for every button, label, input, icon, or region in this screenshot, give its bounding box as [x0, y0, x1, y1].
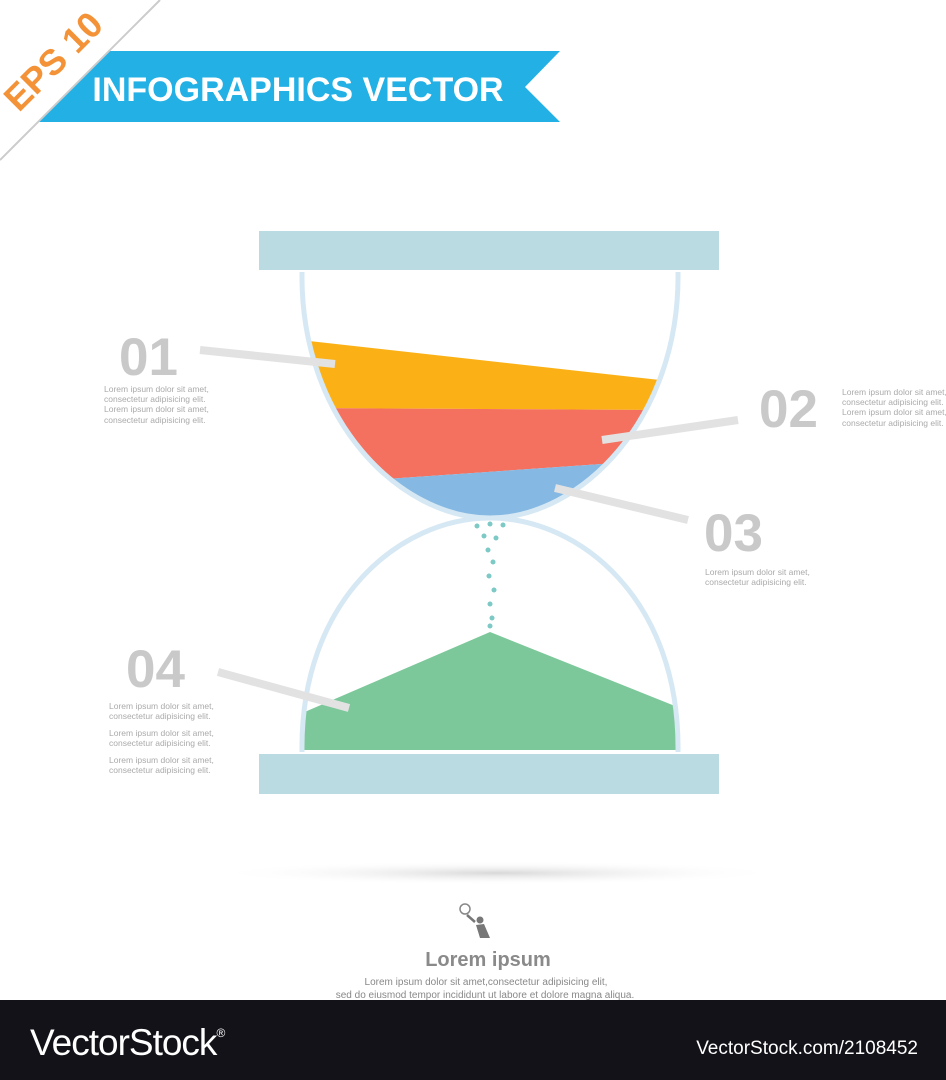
callout 01: consectetur adipisicing elit. [104, 415, 206, 425]
icon: person with lightbulb [460, 904, 490, 938]
callout 04: consectetur adipisicing elit. [109, 765, 211, 775]
watermark bar: VectorStock [30, 1022, 216, 1063]
callout 01 [104, 328, 335, 425]
callout 04: 04 [126, 640, 185, 699]
hourglass [259, 231, 719, 794]
callout 02: 02 [759, 380, 818, 439]
callout 04: Lorem ipsum dolor sit amet, [109, 701, 214, 711]
corner badge: EPS 10 [0, 0, 160, 160]
sand top layers [312, 341, 657, 516]
callout 03: Lorem ipsum dolor sit amet, [705, 567, 810, 577]
callout 02 [602, 380, 946, 440]
title ribbon [36, 51, 560, 122]
footer text block: Lorem ipsum [425, 949, 551, 971]
callout 04 [109, 640, 349, 775]
watermark bar: VectorStock.com/2108452 [696, 1038, 918, 1059]
callout 02: Lorem ipsum dolor sit amet, [842, 387, 946, 397]
callout 01: Lorem ipsum dolor sit amet, [104, 404, 209, 414]
falling sand dots [474, 522, 506, 628]
callout 01: Lorem ipsum dolor sit amet, [104, 384, 209, 394]
sand bottom [300, 632, 680, 750]
callout 04: Lorem ipsum dolor sit amet, [109, 728, 214, 738]
callout 03: 03 [704, 504, 763, 563]
footer text block [336, 949, 634, 1001]
callout 02: consectetur adipisicing elit. [842, 418, 944, 428]
footer text block: Lorem ipsum dolor sit amet,consectetur adipisicing elit, [365, 977, 607, 988]
title ribbon: INFOGRAPHICS VECTOR [92, 71, 504, 109]
callout 02: Lorem ipsum dolor sit amet, [842, 407, 946, 417]
watermark bar [0, 1000, 946, 1080]
callout 01: consectetur adipisicing elit. [104, 394, 206, 404]
watermark bar: ® [216, 1026, 225, 1040]
callout 04: consectetur adipisicing elit. [109, 711, 211, 721]
callout 02: consectetur adipisicing elit. [842, 397, 944, 407]
callout 04: consectetur adipisicing elit. [109, 738, 211, 748]
callout 01: 01 [119, 328, 178, 387]
callout 03 [555, 488, 810, 587]
callout 04: Lorem ipsum dolor sit amet, [109, 755, 214, 765]
shadow [213, 861, 783, 885]
callout 03: consectetur adipisicing elit. [705, 577, 807, 587]
footer text block: sed do eiusmod tempor incididunt ut labore et dolore magna aliqua. [336, 990, 634, 1001]
